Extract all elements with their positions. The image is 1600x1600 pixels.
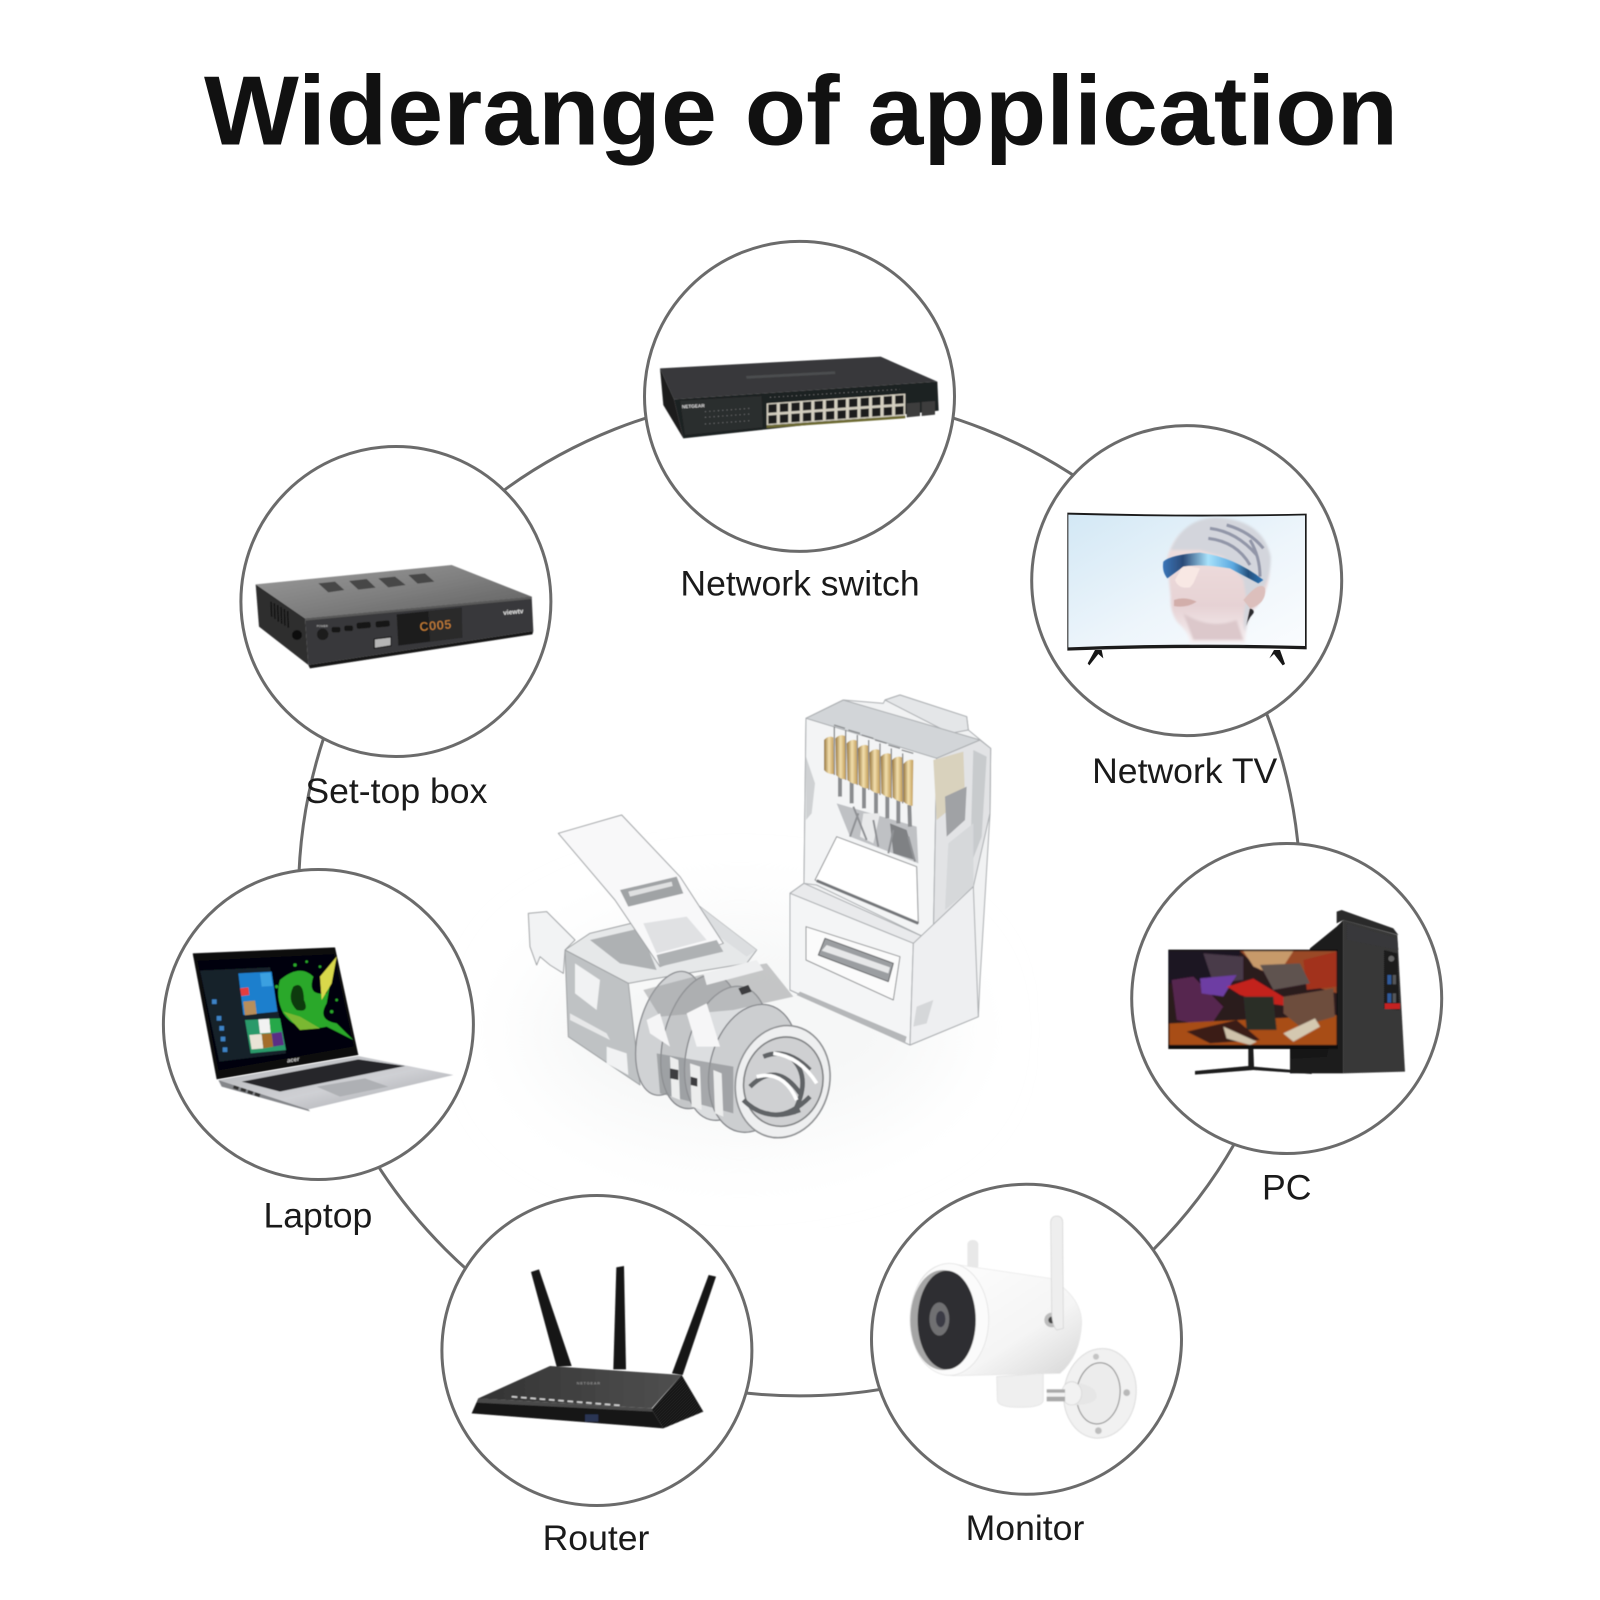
circle: set-top box <box>241 446 551 756</box>
device: laptop <box>193 947 453 1111</box>
product shadow <box>530 920 950 1140</box>
centre product: RJ45 connector and boot <box>528 695 991 1148</box>
device: curved TV <box>1067 513 1307 665</box>
connecting ring <box>298 394 1300 1396</box>
device: desktop PC and monitor <box>1168 910 1405 1075</box>
circle: network TV <box>1032 426 1342 736</box>
panel: network TV <box>1032 426 1342 791</box>
circle: router <box>442 1196 752 1506</box>
left latch and boot <box>528 815 757 1085</box>
contact legs <box>840 777 910 827</box>
label: network TV: Network TV <box>1092 751 1278 791</box>
device: set-top box: POWER <box>317 624 329 628</box>
title: Widerange of application <box>204 56 1398 166</box>
label: network switch: Network switch <box>680 564 920 604</box>
boot rings <box>624 960 842 1148</box>
panel: PC <box>1132 844 1442 1208</box>
contact comb <box>834 725 913 803</box>
device: outdoor camera <box>910 1216 1142 1443</box>
panel: monitor camera <box>872 1184 1182 1548</box>
panel: network switch <box>644 241 954 604</box>
label: router: Router <box>543 1518 650 1558</box>
label: laptop: Laptop <box>263 1196 372 1236</box>
circle: PC <box>1132 844 1442 1154</box>
device: laptop: acer <box>287 1057 300 1065</box>
circle: network switch <box>644 241 954 551</box>
device: router: NETGEAR <box>577 1381 601 1386</box>
panel: laptop <box>163 870 473 1236</box>
device: set-top box <box>256 565 533 668</box>
label: PC: PC <box>1262 1168 1311 1208</box>
device: set-top box: viewtv <box>503 608 524 617</box>
right plug <box>790 695 991 1045</box>
label: monitor: Monitor <box>966 1508 1084 1548</box>
device: network switch <box>660 357 939 438</box>
device: set-top box: C005 <box>419 617 453 634</box>
circle: laptop <box>163 870 473 1180</box>
label: set-top box: Set-top box <box>305 771 488 811</box>
panel: router <box>442 1196 752 1558</box>
device: router <box>472 1266 716 1428</box>
panel: set-top box <box>241 446 551 811</box>
device: network switch: NETGEAR <box>682 403 705 409</box>
circle: monitor <box>872 1184 1182 1494</box>
gold contacts <box>824 735 913 806</box>
